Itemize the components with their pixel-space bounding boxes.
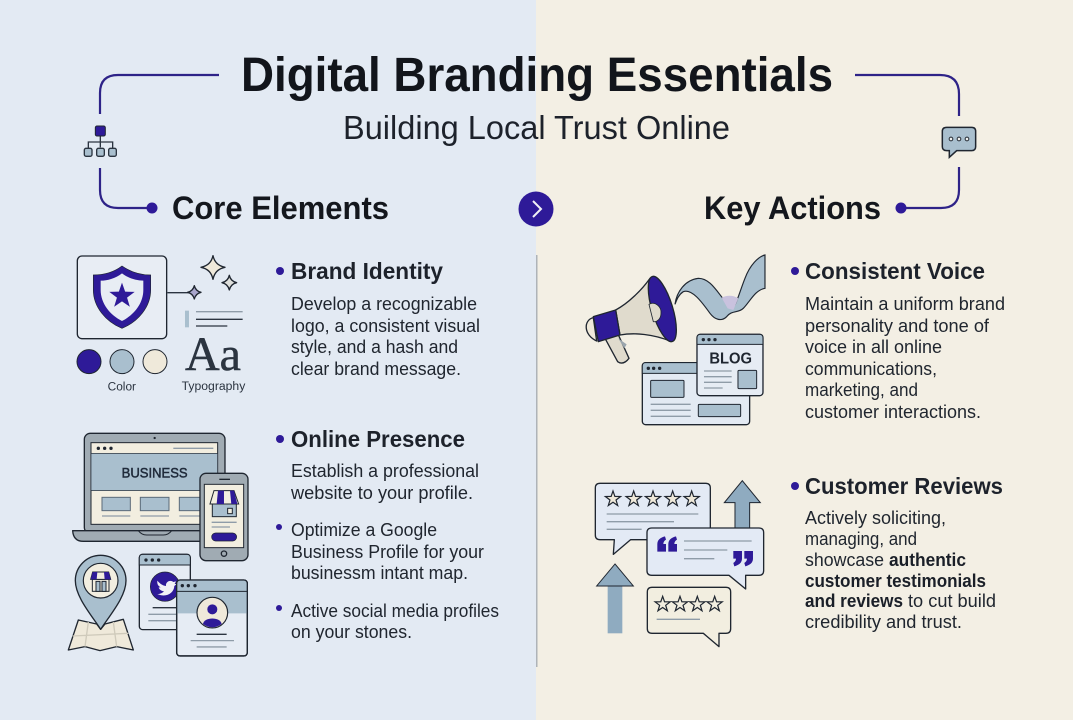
background: right panel bbox=[536, 0, 1073, 720]
text: online presence: Optimize a Google bbox=[291, 520, 437, 540]
text: customer reviews: authentic bbox=[889, 550, 966, 570]
title: Digital Branding Essentials bbox=[241, 49, 833, 102]
text: online presence: Active social media profiles bbox=[291, 601, 499, 621]
illustration: brand identity: Aa bbox=[185, 329, 241, 381]
text: brand identity: clear brand message. bbox=[291, 359, 461, 379]
text: brand identity: Brand Identity bbox=[291, 258, 443, 284]
text: online presence: on your stones. bbox=[291, 622, 412, 642]
icon: center arrow button bbox=[518, 192, 554, 226]
illustration: brand identity: Typography bbox=[182, 379, 245, 393]
text: consistent voice bbox=[791, 258, 1005, 422]
text: customer reviews: to cut build bbox=[908, 591, 996, 611]
text: online presence: Online Presence bbox=[291, 426, 465, 452]
illustration: megaphone and blog: BLOG bbox=[709, 351, 752, 368]
text: consistent voice: customer interactions. bbox=[805, 402, 981, 422]
background: left panel bbox=[0, 0, 536, 720]
text: online presence: website to your profile. bbox=[290, 483, 473, 503]
illustration: online presence: BUSINESS bbox=[122, 465, 188, 481]
illustration: reviews bbox=[595, 481, 764, 647]
heading: key actions: Key Actions bbox=[704, 190, 881, 226]
text: customer reviews: credibility and trust. bbox=[805, 612, 962, 632]
text: customer reviews: managing, and bbox=[805, 529, 917, 549]
text: customer reviews: Customer Reviews bbox=[805, 473, 1003, 499]
text: online presence bbox=[276, 426, 499, 642]
text: customer reviews: and reviews bbox=[805, 591, 903, 611]
text: consistent voice: communications, bbox=[805, 359, 937, 379]
illustration: brand identity: Color bbox=[108, 380, 136, 394]
text: online presence: Business Profile for your bbox=[291, 542, 484, 562]
text: customer reviews: customer testimonials bbox=[805, 571, 986, 591]
left connector bracket bbox=[100, 75, 219, 214]
icon: chat bubble bbox=[942, 127, 976, 157]
text: online presence: Establish a professional bbox=[291, 461, 479, 481]
text: consistent voice: Consistent Voice bbox=[805, 258, 985, 284]
illustration: megaphone and blog bbox=[586, 255, 765, 425]
text: customer reviews: showcase bbox=[805, 550, 884, 570]
text: customer reviews bbox=[791, 473, 1003, 632]
text: customer reviews: Actively soliciting, bbox=[805, 508, 946, 528]
text: consistent voice: marketing, and bbox=[805, 380, 918, 400]
text: brand identity: Develop a recognizable bbox=[291, 294, 477, 314]
subtitle: Building Local Trust Online bbox=[343, 109, 730, 146]
text: consistent voice: personality and tone of bbox=[805, 316, 990, 336]
right connector bracket bbox=[855, 75, 959, 214]
illustration: brand identity bbox=[77, 256, 245, 394]
text: online presence: businessm intant map. bbox=[291, 563, 468, 583]
text: brand identity: logo, a consistent visual bbox=[291, 316, 480, 336]
illustration: online presence bbox=[68, 433, 248, 656]
heading: core elements: Core Elements bbox=[172, 190, 389, 226]
text: brand identity: style, and a hash and bbox=[291, 337, 458, 357]
text: consistent voice: Maintain a uniform brand bbox=[805, 294, 1005, 314]
text: consistent voice: voice in all online bbox=[805, 337, 942, 357]
text: brand identity bbox=[276, 258, 480, 379]
icon: org chart bbox=[84, 126, 116, 156]
